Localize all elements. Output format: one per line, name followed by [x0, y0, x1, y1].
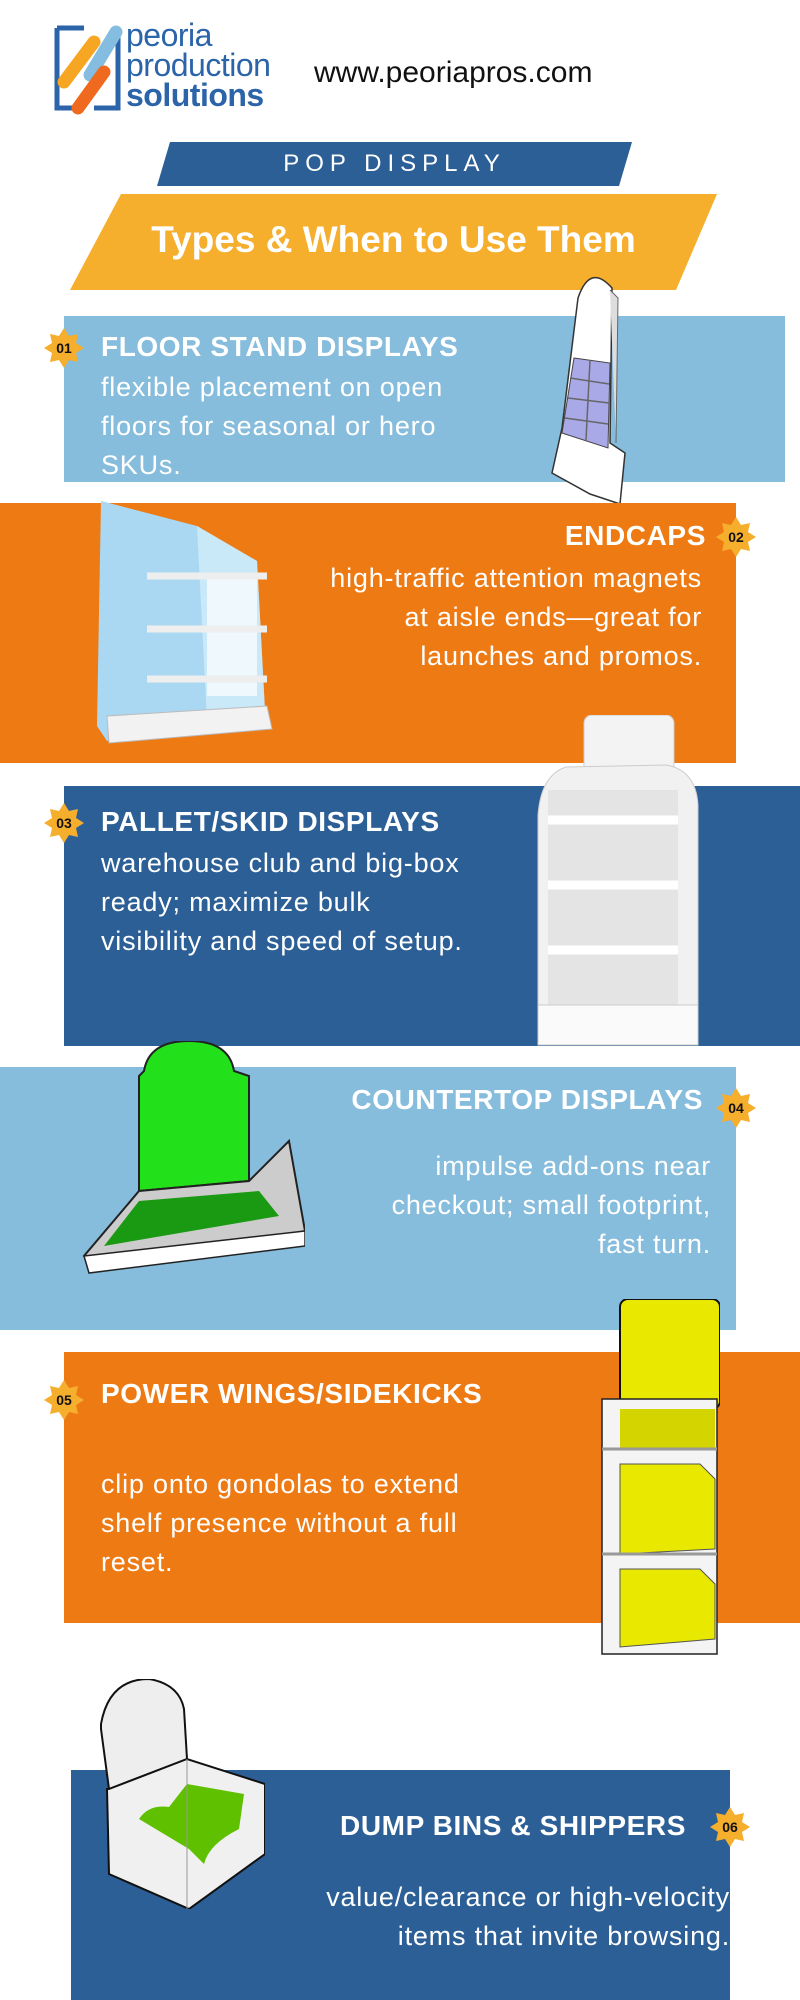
body 02: launches and promos. [420, 641, 702, 671]
badge 02 [716, 517, 756, 557]
panel 5: power wings [64, 1352, 800, 1623]
banner: POP DISPLAY [157, 142, 632, 186]
badge 01: 01 [56, 340, 72, 356]
panel 6: dump bins [71, 1770, 730, 2000]
body 04: checkout; small footprint, [392, 1190, 711, 1220]
banner: title: Types & When to Use Them [151, 219, 636, 260]
heading 06: DUMP BINS & SHIPPERS [340, 1810, 686, 1841]
image: dump bin [100, 1679, 265, 1909]
body 06: items that invite browsing. [398, 1921, 730, 1951]
body 02: at aisle ends—great for [404, 602, 702, 632]
heading 03: PALLET/SKID DISPLAYS [101, 806, 440, 837]
panel 1: floor stand [64, 316, 785, 482]
logo [54, 17, 270, 114]
body 05: clip onto gondolas to extend [101, 1469, 460, 1499]
badge 06 [710, 1807, 750, 1847]
body 02: high-traffic attention magnets [330, 563, 702, 593]
badge 04: 04 [728, 1100, 744, 1116]
body 04 [392, 1151, 711, 1259]
logo: production [126, 47, 270, 83]
logo: peoria [126, 17, 212, 53]
body 03: visibility and speed of setup. [101, 926, 463, 956]
body 03: warehouse club and big-box [101, 848, 460, 878]
url: www.peoriapros.com [314, 56, 592, 89]
panel 3: pallet [64, 786, 800, 1046]
body 02 [330, 563, 702, 671]
body 05: shelf presence without a full [101, 1508, 457, 1538]
badge 05 [44, 1380, 84, 1420]
body 01: SKUs. [101, 450, 182, 480]
image: endcap [97, 501, 273, 744]
body 04: fast turn. [598, 1229, 711, 1259]
heading 04: COUNTERTOP DISPLAYS [351, 1084, 703, 1115]
banner: POP DISPLAY: POP DISPLAY [283, 150, 506, 177]
body 01: floors for seasonal or hero [101, 411, 436, 441]
heading 01: FLOOR STAND DISPLAYS [101, 331, 458, 362]
body 01: flexible placement on open [101, 372, 443, 402]
body 04: impulse add-ons near [435, 1151, 711, 1181]
image: pallet shelf [538, 715, 698, 1046]
body 03 [101, 848, 463, 956]
badge 03 [44, 803, 84, 843]
panel 2: endcaps [0, 503, 736, 763]
badge 05: 05 [56, 1392, 72, 1408]
image: floor stand [551, 276, 626, 503]
body 01 [101, 372, 443, 480]
badge 01 [44, 328, 84, 368]
heading 02: ENDCAPS [565, 520, 706, 551]
body 05 [101, 1469, 460, 1577]
badge 06: 06 [722, 1819, 738, 1835]
banner: title [70, 194, 717, 290]
logo: solutions [126, 77, 264, 113]
body 03: ready; maximize bulk [101, 887, 371, 917]
image: power wing [601, 1299, 720, 1655]
heading 05: POWER WINGS/SIDEKICKS [101, 1378, 482, 1409]
image: countertop [82, 1041, 305, 1274]
badge 02: 02 [728, 529, 744, 545]
panel 4: countertop [0, 1067, 736, 1330]
badge 03: 03 [56, 815, 72, 831]
body 06: value/clearance or high-velocity [326, 1882, 730, 1912]
body 05: reset. [101, 1547, 173, 1577]
body 06 [326, 1882, 730, 1951]
badge 04 [716, 1088, 756, 1128]
